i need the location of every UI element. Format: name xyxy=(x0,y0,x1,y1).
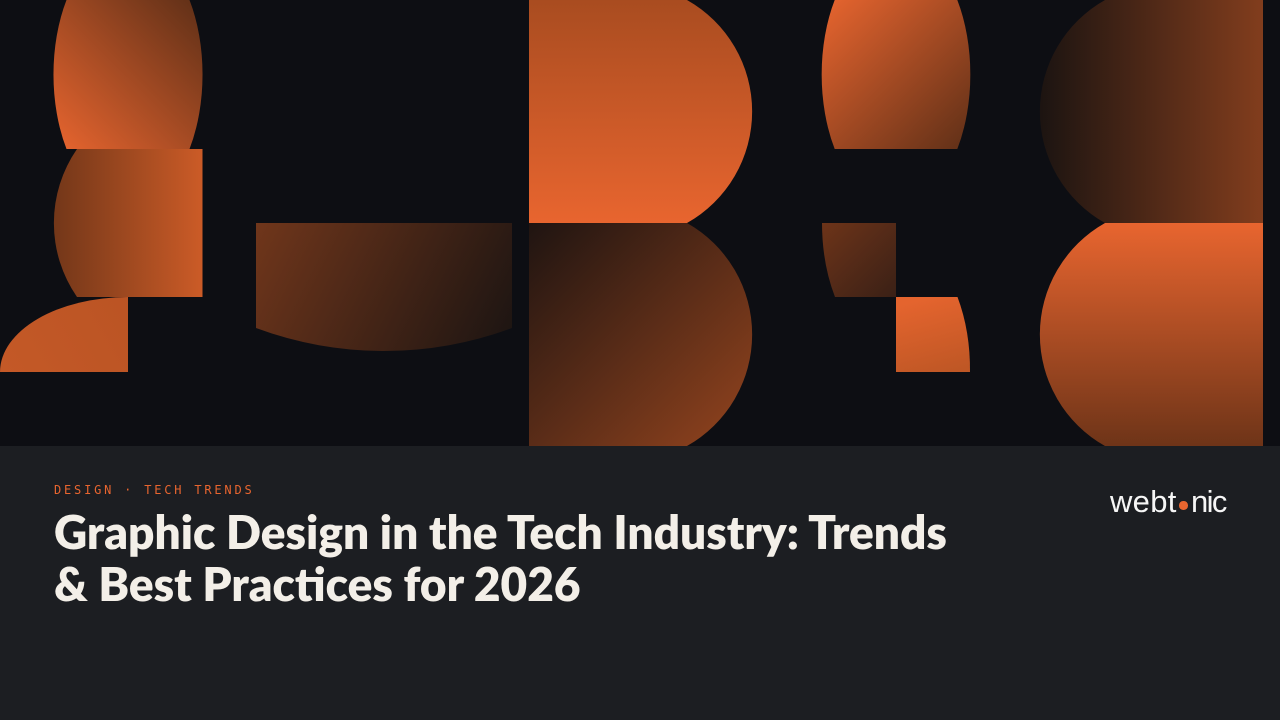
shape: centre barrel xyxy=(822,0,970,149)
geometric artwork panel xyxy=(0,0,1280,446)
shape: small left tile xyxy=(822,223,896,297)
shape: left half-round block xyxy=(54,149,202,297)
logo: webtonic: webt xyxy=(1110,484,1177,519)
kicker label: DESIGN · TECH TRENDS xyxy=(54,483,254,497)
title: Graphic Design in the Tech Industry: Trends xyxy=(54,504,947,559)
logo: webtonic xyxy=(1110,484,1226,519)
shape: wide bowl xyxy=(256,223,512,351)
title: & Best Practices for 2026 xyxy=(54,556,581,611)
shape: small right tile xyxy=(896,297,970,372)
shape: lower reversed D xyxy=(1040,223,1263,446)
footer panel xyxy=(0,446,1280,720)
logo: webtonic: nic xyxy=(1191,484,1226,519)
shape: quarter round xyxy=(0,297,128,372)
shape: upper D form xyxy=(529,0,752,223)
shape: top-left barrel xyxy=(53,0,203,149)
shape: lower D form xyxy=(529,223,752,446)
shape: upper reversed D xyxy=(1040,0,1263,223)
title xyxy=(54,504,947,611)
